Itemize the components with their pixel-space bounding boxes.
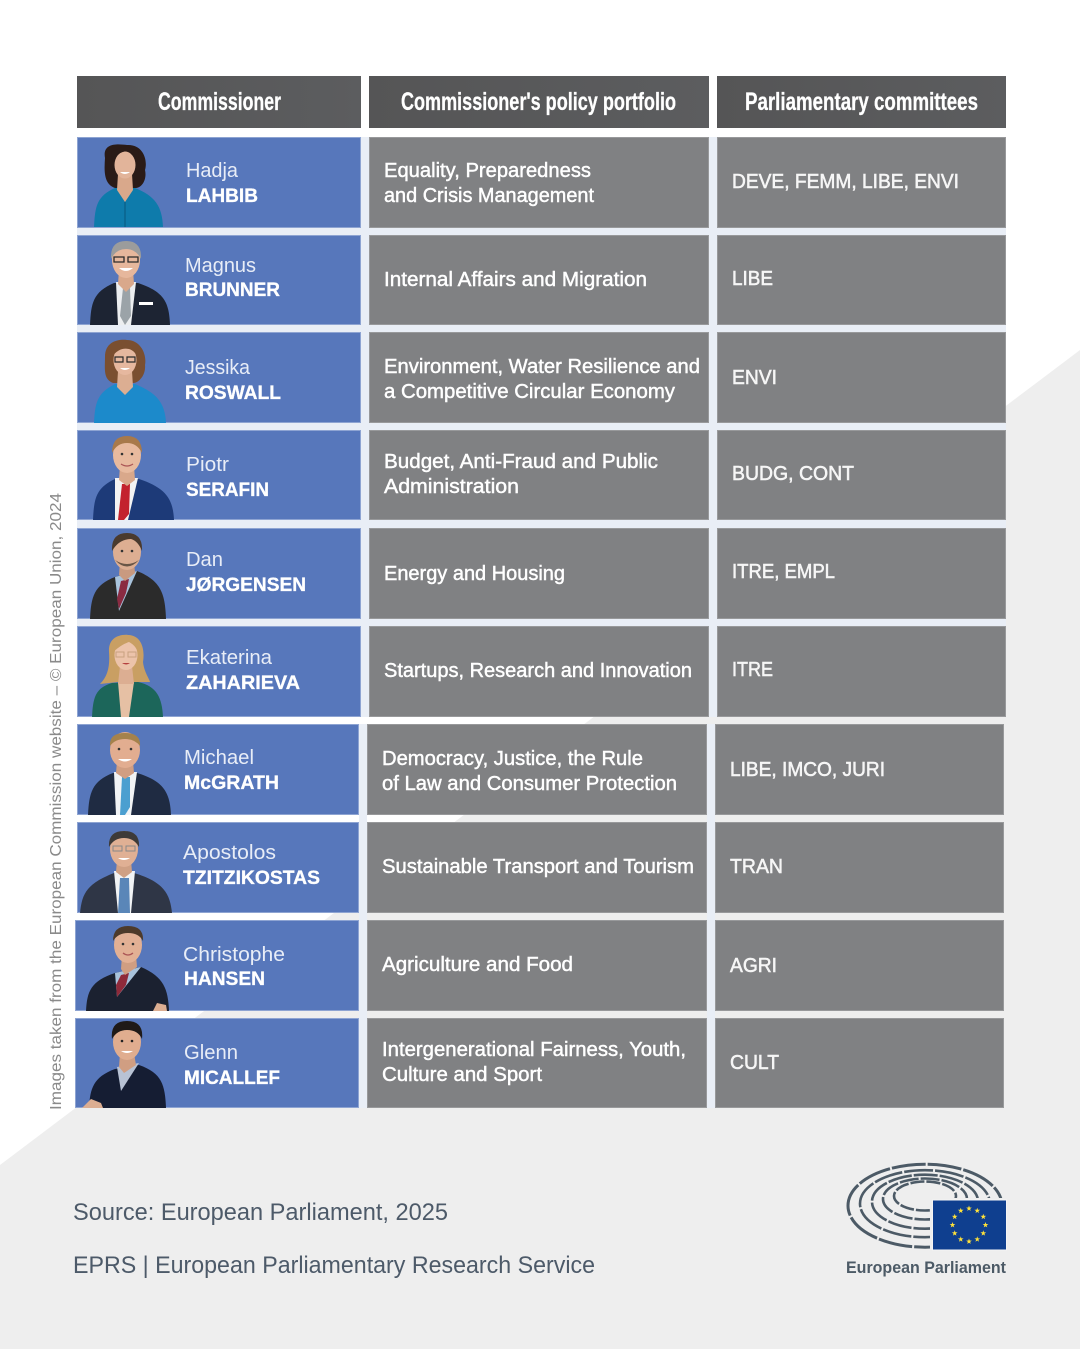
row: Piotr Serafin: BUDG, CONT — [732, 463, 854, 485]
row: Glenn Micallef: Glenn — [184, 1042, 238, 1064]
row: Hadja Lahbib: DEVE, FEMM, LIBE, ENVI — [732, 171, 959, 193]
row: Michael McGrath — [78, 724, 1004, 815]
EPRS credit: EPRS | European Parliamentary Research Service — [73, 1252, 595, 1279]
source text: Source: European Parliament, 2025 — [73, 1199, 448, 1226]
row: Christophe Hansen: Christophe — [183, 944, 285, 966]
row: Glenn Micallef — [76, 1018, 1004, 1108]
row: Jessika Roswall — [78, 332, 1006, 423]
row: Hadja Lahbib: LAHBIB — [186, 186, 258, 207]
row: Hadja Lahbib — [78, 138, 1006, 228]
row: Glenn Micallef: Culture and Sport — [382, 1064, 542, 1086]
row: Piotr Serafin: Budget, Anti-Fraud and Public — [384, 451, 658, 473]
row: Ekaterina Zaharieva: ITRE — [732, 659, 773, 681]
portrait: Tzitzikostas — [80, 831, 172, 913]
row: Magnus Brunner: Internal Affairs and Migration — [384, 269, 647, 291]
row: Dan Jorgensen: Energy and Housing — [384, 563, 565, 585]
row: Jessika Roswall: a Competitive Circular Economy — [384, 381, 675, 403]
portrait: Lahbib — [94, 144, 163, 227]
row: Apostolos Tzitzikostas — [78, 822, 1004, 913]
row: Christophe Hansen: Agriculture and Food — [382, 954, 573, 976]
row: Jessika Roswall: Environment, Water Resilience and — [384, 356, 700, 378]
row: Ekaterina Zaharieva: ZAHARIEVA — [186, 673, 300, 694]
row: Glenn Micallef: Intergenerational Fairness, Youth, — [382, 1039, 686, 1061]
row: Glenn Micallef: CULT — [730, 1052, 779, 1074]
row: Michael McGrath: Michael — [184, 747, 254, 769]
portrait: Brunner — [90, 241, 170, 325]
row: Piotr Serafin: Administration — [384, 476, 519, 498]
row: Apostolos Tzitzikostas: TZITZIKOSTAS — [183, 868, 320, 889]
icon: hemicycle — [848, 1164, 1002, 1247]
portrait: Serafin — [93, 436, 174, 520]
header row — [77, 76, 1006, 128]
row: Jessika Roswall: ENVI — [732, 367, 777, 389]
row: Ekaterina Zaharieva: Ekaterina — [186, 647, 273, 669]
row: Magnus Brunner — [78, 236, 1006, 325]
row: Michael McGrath: Democracy, Justice, the Rule — [382, 748, 643, 770]
row: Christophe Hansen: HANSEN — [184, 969, 265, 990]
row: Michael McGrath: McGRATH — [184, 773, 279, 794]
row: Magnus Brunner: BRUNNER — [185, 280, 280, 301]
row: Dan Jorgensen — [78, 528, 1006, 619]
row: Christophe Hansen — [76, 920, 1004, 1011]
row: Apostolos Tzitzikostas: TRAN — [730, 856, 783, 878]
header row: Commissioner's policy portfolio — [401, 88, 676, 116]
row: Dan Jorgensen: ITRE, EMPL — [732, 561, 835, 583]
row: Hadja Lahbib: Hadja — [186, 160, 239, 182]
icon: EU flag — [932, 1200, 1006, 1250]
row: Michael McGrath: LIBE, IMCO, JURI — [730, 759, 885, 781]
light gaps behind rows — [77, 137, 1006, 1108]
portrait: Jorgensen — [90, 533, 166, 619]
row: Apostolos Tzitzikostas: Apostolos — [183, 842, 276, 864]
row: Magnus Brunner: Magnus — [185, 255, 256, 277]
row: Jessika Roswall: Jessika — [185, 357, 251, 379]
row: Christophe Hansen: AGRI — [730, 955, 777, 977]
row: Magnus Brunner: LIBE — [732, 268, 773, 290]
portrait: Micallef — [82, 1021, 166, 1108]
row: Jessika Roswall: ROSWALL — [185, 383, 281, 404]
portrait: Zaharieva — [92, 635, 163, 717]
row: Hadja Lahbib: Equality, Preparedness — [384, 160, 591, 182]
portrait: Hansen — [86, 926, 169, 1011]
table — [76, 76, 1006, 1108]
row: Apostolos Tzitzikostas: Sustainable Transport and Tourism — [382, 856, 694, 878]
logo wordmark: European Parliament — [846, 1259, 1006, 1277]
portrait: Roswall — [94, 340, 166, 423]
row: Hadja Lahbib: and Crisis Management — [384, 185, 594, 207]
row: Glenn Micallef: MICALLEF — [184, 1068, 280, 1089]
row: Ekaterina Zaharieva — [78, 626, 1006, 717]
row: Michael McGrath: of Law and Consumer Protection — [382, 773, 677, 795]
header row: Commissioner — [158, 88, 281, 116]
logo: European Parliament — [846, 1164, 1006, 1277]
row: Piotr Serafin — [78, 430, 1006, 520]
portrait: McGrath — [88, 732, 171, 815]
image credit vertical text: Images taken from the European Commission website – © European Union, 2024 — [48, 493, 65, 1110]
background diagonal panel — [0, 350, 1080, 1349]
row: Ekaterina Zaharieva: Startups, Research and Innovation — [384, 660, 692, 682]
row: Piotr Serafin: SERAFIN — [186, 480, 269, 501]
header row: Parliamentary committees — [745, 88, 978, 116]
row: Dan Jorgensen: JØRGENSEN — [186, 575, 306, 596]
row: Dan Jorgensen: Dan — [186, 549, 223, 571]
row: Piotr Serafin: Piotr — [186, 454, 229, 476]
